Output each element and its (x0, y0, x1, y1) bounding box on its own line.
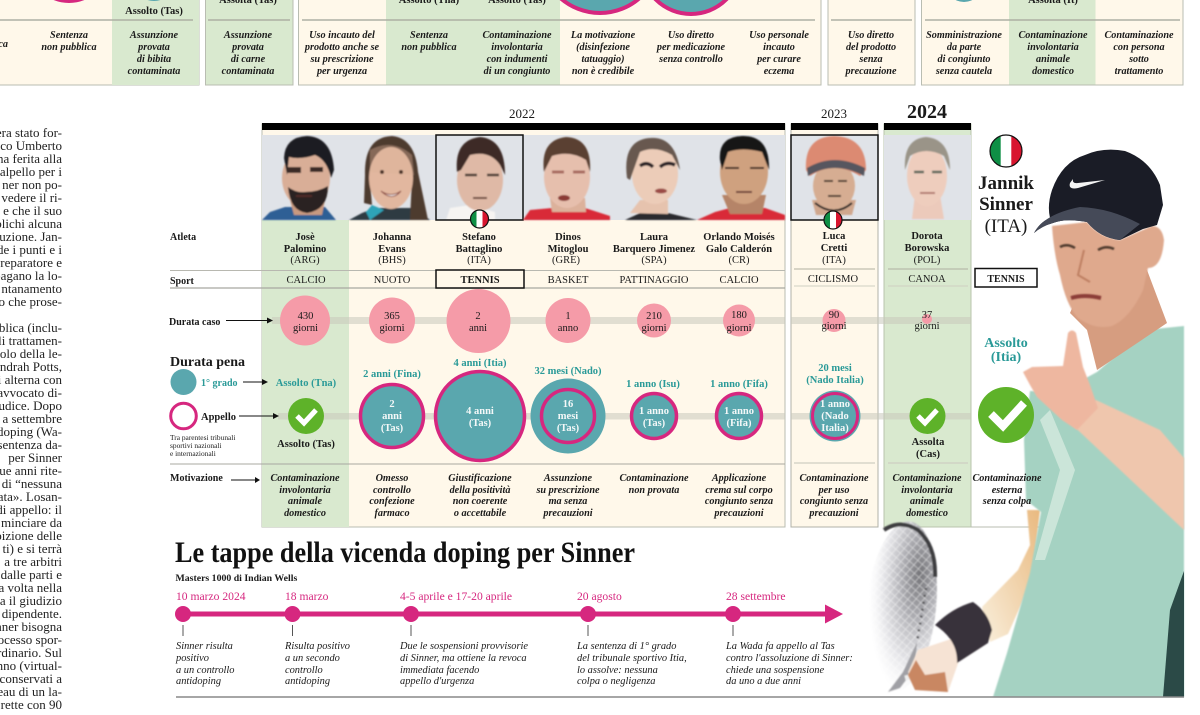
motivations: Applicazione (711, 473, 767, 484)
top motivations: prodotto anche se (304, 42, 380, 53)
motivations: senza colpa (982, 496, 1031, 507)
motivations: non coerente (453, 496, 508, 507)
article text column: uzione. Jan- (0, 229, 62, 244)
motivations: involontaria (901, 485, 953, 496)
top motivations: Sentenza (50, 30, 88, 41)
top motivations: provata (231, 42, 264, 53)
step 3: appello d'urgenza (400, 676, 474, 687)
top motivations: con indumenti (487, 54, 548, 65)
step 3: 4-5 aprile e 17-20 aprile (400, 590, 512, 603)
arrow: 1 grado (243, 379, 268, 385)
top motivations: La motivazione (570, 30, 636, 41)
lower arm and hand (908, 510, 1040, 692)
icon: cap swoosh (1070, 179, 1105, 188)
top motivations: Assunzione (129, 30, 179, 41)
article text column: alpello per i (0, 164, 62, 179)
first-degree verdict labels: 1 anno (Isu) (626, 379, 680, 390)
article text column: o che prose- (0, 294, 62, 309)
step 3: Due le sospensioni provvisorie (399, 641, 528, 652)
step 1: Sinner risulta (176, 641, 233, 652)
panel: top strip of the previous chart section (0, 0, 1183, 85)
panel: 2022 (262, 123, 785, 527)
facial features (1060, 245, 1114, 298)
step 2: controllo (285, 665, 323, 676)
step 3: di Sinner, ma ottiene la revoca (400, 653, 527, 664)
athlete names: (ITA) (467, 255, 491, 266)
bubble labels: 1 anno (639, 406, 669, 417)
step 5: La Wada fa appello al Tas (725, 641, 835, 652)
step 1: antidoping (176, 676, 221, 687)
top motivations: Uso incauto del (309, 30, 375, 41)
article text column: dalle parti e (1, 567, 62, 582)
bubble: Battaglino (436, 372, 524, 460)
legend note: e internazionali (170, 449, 216, 458)
article text column: ner non po- (2, 177, 62, 192)
step 5 (725, 590, 853, 687)
motivations: congiunto senza (800, 496, 868, 507)
top motivations: non è credibile (572, 66, 635, 77)
bubble labels: (Tas) (469, 418, 492, 429)
top motivations: su prescrizione (309, 54, 374, 65)
motivations: controllo (373, 485, 411, 496)
athlete names: (POL) (914, 255, 941, 266)
bubble chart: durata caso: 365 (384, 311, 400, 322)
motivations: della positività (450, 485, 510, 496)
motivations: Contaminazione (972, 473, 1042, 484)
legend note (170, 433, 235, 458)
year: 2022: 2022 (509, 106, 535, 121)
top motivations: di un congiunto (484, 66, 550, 77)
legend note: sportivi nazionali (170, 441, 222, 450)
title: Le tappe della vicenda doping per Sinner (175, 536, 635, 569)
article text column: per Sinner (8, 450, 63, 465)
athlete names (284, 231, 950, 266)
neck (1070, 270, 1167, 370)
shirt (993, 326, 1184, 697)
bubble labels (381, 399, 850, 434)
top verdict labels (125, 0, 1078, 17)
photo: Cretti (791, 135, 878, 229)
motivations: domestico (906, 508, 948, 519)
top motivations: Assunzione (223, 30, 273, 41)
bubble labels: Italia) (821, 423, 849, 434)
top motivations: senza cautela (935, 66, 992, 77)
hand and finger (1023, 330, 1098, 430)
top motivations: Somministrazione (926, 30, 1002, 41)
timeline (175, 590, 853, 687)
top motivations: non pubblica (401, 42, 457, 53)
step 1: a un controllo (176, 665, 234, 676)
top motivations: non pubblica (41, 42, 97, 53)
panel: 2023 (791, 123, 878, 527)
article text column: blica (inclu- (0, 320, 62, 335)
icon: check Palomino (288, 398, 324, 434)
verdict: Palomino: Assolto (Tas) (277, 439, 335, 450)
first-degree verdict labels: 20 mesi (818, 363, 852, 374)
article text column: conservati a (0, 671, 62, 686)
step 5: contro l'assoluzione di Sinner: (726, 653, 853, 664)
motivations: per uso (818, 485, 849, 496)
step 2: 18 marzo (285, 590, 329, 603)
label: Sport: Sport (170, 276, 195, 287)
top motivations: Uso diretto (848, 30, 894, 41)
step 4: colpa o negligenza (577, 676, 656, 687)
top motivations: eczema (764, 66, 794, 77)
label: Appello: Appello (201, 412, 236, 423)
year: 2023: 2023 (821, 106, 847, 121)
top motivations: trattamento (1115, 66, 1163, 77)
article text column: vedere il ri- (1, 190, 62, 205)
motivations: precauzioni (808, 508, 859, 519)
photo: Barquero (625, 138, 697, 220)
top verdict labels: Assolto (Tas) (125, 6, 183, 17)
athlete names: Galo Calderón (706, 244, 772, 255)
article text column: dipendente. (2, 606, 62, 621)
arrow: Motivazione (231, 477, 260, 483)
step 3: immediata facendo (400, 665, 479, 676)
first-degree verdict labels: Assolto (984, 336, 1028, 351)
bubble chart: durata caso: giorni (379, 323, 405, 334)
motivations: animale (288, 496, 322, 507)
sport labels: CALCIO (286, 275, 326, 286)
top motivations: sotto (1128, 54, 1149, 65)
photo: Galo Calderon (697, 136, 785, 220)
top motivations: Contaminazione (482, 30, 552, 41)
first-degree verdict labels (276, 336, 1028, 390)
step 3 (399, 590, 528, 687)
sport labels: CALCIO (719, 275, 759, 286)
athlete names: Stefano (462, 232, 496, 243)
verdict: Borowska: (Cas) (916, 449, 940, 460)
label: Atleta: Atleta (170, 232, 196, 243)
bubble chart: durata caso: 430 (298, 311, 313, 322)
bubble labels: (Nado (821, 411, 849, 422)
motivations: Contaminazione (270, 473, 340, 484)
bubble labels: (Tas) (557, 423, 580, 434)
arrow: Durata caso (226, 318, 273, 324)
panel: 2024 (884, 123, 971, 527)
label: Motivazione: Motivazione (170, 473, 223, 484)
article text column: rette con 90 (1, 697, 62, 712)
label: Durata caso: Durata caso (169, 317, 220, 328)
bubble labels: 1 anno (820, 399, 850, 410)
bubble: Barquero (632, 394, 676, 438)
step 2: a un secondo (285, 653, 340, 664)
bubble labels: (Tas) (643, 418, 666, 429)
article text column: ntanamento (1, 281, 62, 296)
first-degree verdict labels: (Itia) (991, 350, 1021, 365)
motivations: involontaria (279, 485, 331, 496)
bubble: Galo Calderon (716, 394, 762, 438)
step 5: da uno a due anni (726, 676, 801, 687)
motivations: farmaco (374, 508, 410, 519)
first-degree verdict labels: (Nado Italia) (806, 375, 864, 386)
top motivations: con persona (1113, 42, 1165, 53)
step 2 (284, 590, 350, 687)
sport labels: PATTINAGGIO (619, 275, 689, 286)
first-degree verdict labels: 4 anni (Itia) (453, 358, 507, 369)
top motivations: (disinfezione (576, 42, 630, 53)
sport labels: BASKET (548, 275, 589, 286)
top motivations: per urgenza (316, 66, 367, 77)
row labels (169, 232, 245, 484)
motivations: Contaminazione (619, 473, 689, 484)
article text column: reparatore e (0, 255, 62, 270)
motivations: Contaminazione (892, 473, 962, 484)
athlete names: Josè (295, 232, 315, 243)
verdict: Borowska: Assolta (912, 437, 945, 448)
athlete names: Luca (823, 231, 846, 242)
right forearm (1064, 400, 1184, 530)
athlete names: Cretti (821, 243, 847, 254)
sport labels: TENNIS (460, 275, 500, 286)
bubble chart: durata caso (280, 289, 940, 353)
face (1052, 222, 1164, 327)
step 5: 28 settembre (726, 590, 786, 603)
timeline bands (272, 317, 971, 420)
top motivations: senza (858, 54, 883, 65)
athlete names: Palomino (284, 244, 326, 255)
arrows (226, 318, 279, 483)
racket (857, 518, 945, 696)
bubble chart: durata pena (276, 336, 1034, 460)
sport labels: CICLISMO (808, 274, 858, 285)
top motivations: senza controllo (658, 54, 723, 65)
label: 1 grado: 1° grado (201, 378, 238, 389)
step 1 (175, 590, 246, 687)
top motivations: Contaminazione (1104, 30, 1174, 41)
athlete names: Mitoglou (548, 244, 589, 255)
icon: check Sinner (978, 387, 1034, 443)
motivations (270, 473, 1042, 519)
athlete names: (ARG) (290, 255, 320, 266)
step 4: 20 agosto (577, 590, 622, 603)
top motivations: di bibita (137, 54, 171, 65)
top motivations: di carne (231, 54, 266, 65)
article text column: minciare da (1, 515, 62, 530)
step 2: Risulta positivo (284, 641, 350, 652)
motivations: congiunto senza (705, 496, 773, 507)
legend note: Tra parentesi tribunali (170, 433, 235, 442)
photo: Mitoglou (523, 137, 610, 220)
motivations: crema sul corpo (705, 485, 773, 496)
icon: Italian flag large (990, 135, 1022, 167)
top motivations: provata (137, 42, 170, 53)
top motivations (0, 30, 1174, 77)
icon: Italian flag (470, 210, 488, 228)
bubble chart: durata caso: 2 (475, 311, 481, 322)
verdict: Borowska (912, 437, 945, 460)
step 4: del tribunale sportivo Itia, (577, 653, 687, 664)
bubble chart: durata caso: giorni (726, 323, 752, 334)
top motivations: per curare (756, 54, 801, 65)
arrow: Appello (239, 413, 279, 419)
cap (1034, 150, 1163, 240)
bubble: Cretti (810, 390, 860, 442)
motivations: precauzioni (542, 508, 593, 519)
first-degree verdict labels: 2 anni (Fina) (363, 369, 421, 380)
top motivations: involontaria (491, 42, 543, 53)
cap brim (1034, 207, 1140, 240)
year: 2024: 2024 (907, 101, 947, 123)
sport labels: NUOTO (374, 275, 411, 286)
top motivations: animale (1036, 54, 1070, 65)
Sinner headline block: Jannik (978, 173, 1034, 194)
sport labels: CANOA (908, 274, 946, 285)
step 1: positivo (175, 653, 209, 664)
bubble labels: 1 anno (724, 406, 754, 417)
label: Durata pena: Durata pena (170, 355, 245, 370)
article text column (0, 125, 63, 712)
athlete names: (BHS) (378, 255, 406, 266)
icon: check Borowska (910, 398, 946, 434)
bubble chart: durata caso: anno (558, 323, 578, 334)
photo: Battaglino (436, 135, 523, 228)
first-degree verdict labels: Assolto (Tna) (276, 378, 337, 389)
shirt highlight (1035, 410, 1075, 560)
article text column: udice. Dopo (0, 398, 62, 413)
article text column: a tre arbitri (4, 554, 62, 569)
motivations: Omesso (376, 473, 408, 484)
subtitle: Masters 1000 di Indian Wells (176, 573, 297, 584)
article text column: li trattamen- (0, 333, 62, 348)
athlete names: Orlando Moisés (703, 232, 775, 243)
top motivations: Sentenza (410, 30, 448, 41)
step 4: La sentenza di 1° grado (576, 641, 676, 652)
athlete names: (ITA) (822, 255, 846, 266)
motivations: Contaminazione (799, 473, 869, 484)
step 1: 10 marzo 2024 (176, 590, 246, 603)
bubble chart: durata caso: 37 (922, 310, 932, 321)
motivations: Assunzione (543, 473, 593, 484)
athlete names: (SPA) (641, 255, 667, 266)
top motivations: Contaminazione (1018, 30, 1088, 41)
top motivations: per medicazione (656, 42, 726, 53)
athlete names: Borowska (905, 243, 950, 254)
top motivations: incauto (763, 42, 795, 53)
bubble chart: durata caso: 1 (565, 311, 571, 322)
bubble labels: anni (382, 411, 402, 422)
top motivations: di congiunto (938, 54, 990, 65)
motivations: ma senza (549, 496, 587, 507)
article text column: di “nessuna (2, 476, 62, 491)
top motivations: domestico (1032, 66, 1074, 77)
article text column: ti) e si terrà (2, 541, 62, 556)
top motivations: involontaria (1027, 42, 1079, 53)
sport labels: TENNIS (987, 274, 1025, 285)
athlete names: (GRE) (552, 255, 580, 266)
athlete names: Barquero Jimenez (613, 244, 695, 255)
legend icon: teal circle (170, 369, 196, 395)
step 5: chiede una sospensione (726, 665, 825, 676)
bubble labels: 16 (563, 399, 573, 410)
bubble chart: durata caso: giorni (641, 323, 667, 334)
athlete names: Dorota (911, 231, 943, 242)
motivations: esterna (992, 485, 1022, 496)
top motivations: da parte (947, 42, 982, 53)
bubble chart: durata caso: giorni (914, 321, 940, 332)
motivations: non provata (629, 485, 679, 496)
top motivations: del prodotto (846, 42, 896, 53)
photo: Palomino (262, 136, 336, 220)
bubble labels: (Fifa) (726, 418, 752, 429)
bubble labels: 4 anni (466, 406, 494, 417)
Sinner headline block: (ITA) (985, 216, 1027, 237)
shirt shading (1163, 571, 1184, 697)
bubble chart: durata caso: 90 (829, 310, 839, 321)
athlete names: Battaglino (456, 244, 502, 255)
first-degree verdict labels: 1 anno (Fifa) (710, 379, 768, 390)
top motivations: tatuaggio) (581, 54, 625, 65)
athlete names: Johanna (373, 232, 412, 243)
article text column: a volta nella (0, 580, 62, 595)
top motivations: contaminata (222, 66, 274, 77)
top motivations: contaminata (128, 66, 180, 77)
Sinner headline block: Sinner (979, 194, 1033, 215)
icon: Italian flag (824, 211, 842, 229)
athlete names: Dinos (555, 232, 581, 243)
top motivations: precauzione (845, 66, 897, 77)
legend icon: pink ring (171, 403, 196, 429)
bubble labels: 2 (389, 399, 395, 410)
top circles (29, 0, 982, 14)
Sinner headline block (978, 135, 1034, 237)
top motivations: Uso diretto (668, 30, 714, 41)
step 4: lo assolve: nessuna (577, 665, 658, 676)
athlete names: Evans (378, 244, 406, 255)
photo strip background (262, 135, 971, 220)
timeline arrow (183, 604, 843, 624)
bubble chart: durata caso: 210 (646, 311, 662, 322)
motivations: precauzioni (713, 508, 764, 519)
athlete names: (CR) (728, 255, 750, 266)
step 4 (576, 590, 687, 687)
bubble chart: durata caso: anni (469, 323, 487, 334)
motivations: animale (910, 496, 944, 507)
bubble chart: durata caso: giorni (293, 323, 318, 334)
separator lines (170, 269, 1040, 527)
bubble: Mitoglou (530, 378, 606, 454)
bubble chart: durata caso: 180 (731, 310, 747, 321)
timeline dots (175, 606, 741, 622)
athlete names: Laura (640, 232, 669, 243)
Sinner figure (857, 150, 1184, 697)
article text column: e che il suo (3, 203, 62, 218)
motivations: o accettabile (454, 508, 507, 519)
motivations: su prescrizione (535, 485, 600, 496)
first-degree verdict labels: 32 mesi (Nado) (534, 366, 602, 377)
article text column: a settembre (2, 411, 62, 426)
bubble chart: durata caso: giorni (821, 321, 847, 332)
motivations: domestico (284, 508, 326, 519)
motivations: confezione (369, 496, 415, 507)
sport labels (286, 268, 1037, 288)
bubble: Evans (360, 384, 424, 448)
motivations: Giustificazione (448, 473, 512, 484)
bubble labels: (Tas) (381, 423, 404, 434)
top motivations: Uso personale (749, 30, 809, 41)
photo: Evans (349, 136, 430, 220)
step 2: antidoping (285, 676, 330, 687)
photo: Borowska (905, 137, 950, 219)
bubble labels: mesi (558, 411, 578, 422)
